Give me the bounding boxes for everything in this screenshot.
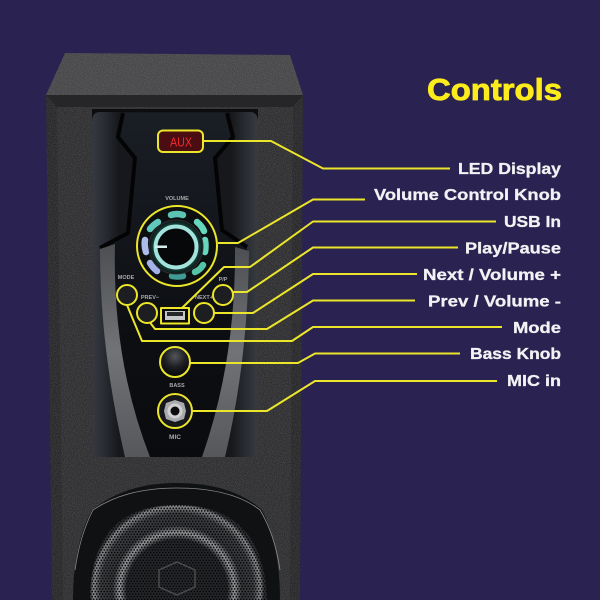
usb highlight [161, 308, 189, 324]
next highlight [194, 303, 214, 323]
labels: Mode [513, 320, 561, 337]
panel small labels: P/P [219, 277, 228, 283]
panel small labels: PREV− [141, 295, 159, 301]
grille [90, 505, 267, 600]
LED display [159, 131, 203, 152]
knob marker [155, 246, 167, 248]
prev highlight [137, 303, 157, 323]
frame highlight [75, 488, 280, 570]
labels: LED Display [458, 161, 561, 178]
panel centre [100, 113, 247, 457]
speaker cabinet [46, 53, 303, 600]
cabinet front [46, 95, 303, 600]
volume knob [137, 206, 217, 286]
panel recess [92, 109, 258, 139]
line: next [214, 274, 417, 313]
mic jack [159, 395, 191, 427]
right grey strip [202, 247, 249, 457]
volume highlight [137, 206, 217, 286]
panel small labels [118, 196, 228, 441]
line: usb [182, 222, 496, 308]
prev button [138, 304, 156, 322]
play pause button [214, 286, 232, 304]
play pause highlight [213, 285, 233, 305]
labels: USB In [504, 214, 561, 231]
labels: Volume Control Knob [374, 187, 561, 204]
bass knob [161, 348, 189, 376]
line: LED display [203, 141, 450, 168]
LED display: AUX [170, 134, 192, 150]
glow ring [156, 226, 196, 268]
line: mic [192, 381, 497, 411]
left grey strip [100, 244, 150, 457]
LED display highlight [158, 130, 203, 152]
left sculpted edge [100, 113, 135, 248]
usb port [162, 309, 189, 323]
mic highlight [158, 394, 192, 428]
centre hexagon [159, 562, 195, 595]
labels: MIC in [507, 373, 561, 390]
knob base [137, 206, 217, 286]
title: Controls [427, 72, 562, 107]
labels: Next / Volume + [423, 267, 561, 284]
control panel [92, 109, 258, 457]
line: bass [190, 354, 460, 363]
bass highlight [160, 347, 190, 377]
panel body [92, 112, 258, 457]
line: mode [127, 305, 502, 341]
callout lines [117, 130, 502, 428]
buttons and ports [118, 286, 232, 427]
labels: Bass Knob [470, 346, 561, 363]
right sculpted edge [215, 113, 247, 247]
mode highlight [117, 285, 137, 305]
cabinet top [46, 53, 303, 95]
next button [195, 304, 213, 322]
mode button [118, 286, 136, 304]
line: prev [150, 300, 415, 329]
panel small labels: VOLUME [165, 196, 189, 202]
panel small labels: NEXT+ [195, 295, 213, 301]
knob dial [149, 220, 203, 274]
labels: Play/Pause [465, 240, 561, 258]
line: play pause [233, 248, 458, 292]
labels [374, 161, 561, 390]
line: volume [218, 200, 365, 243]
panel small labels: BASS [169, 383, 185, 389]
panel small labels: MIC [169, 434, 181, 441]
light segments [145, 214, 206, 276]
driver frame [73, 483, 280, 600]
speaker driver [73, 483, 280, 600]
bevel [46, 95, 303, 107]
labels: Prev / Volume - [428, 294, 561, 310]
grille mesh [90, 505, 267, 600]
panel small labels: MODE [118, 275, 135, 281]
cabinet inner face [57, 107, 293, 600]
